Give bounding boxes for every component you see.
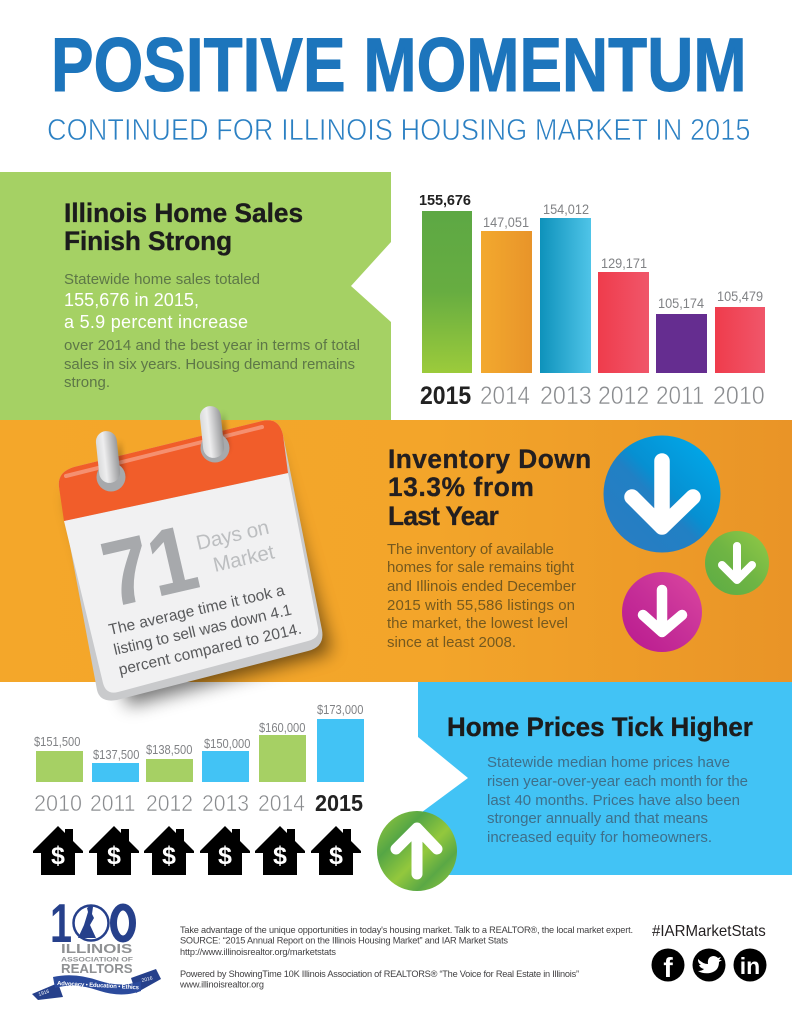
icons: dollar houses: $ bbox=[107, 842, 121, 870]
calendar text: percent compared to 2014. bbox=[117, 621, 303, 679]
bar chart: median prices: $137,500 bbox=[93, 747, 140, 762]
text: home sales body bbox=[64, 271, 360, 391]
panel: home prices bbox=[418, 682, 792, 875]
bar chart: home sales by year: 2015 bbox=[420, 382, 471, 410]
bar chart: median prices: 2012 bbox=[146, 790, 193, 816]
calendar number: 71 bbox=[93, 505, 206, 626]
text: home sales body: sales in six years. Housing demand remains bbox=[64, 356, 355, 373]
bar chart: home sales by year: 155,676 bbox=[419, 193, 471, 209]
icon: linkedin: in bbox=[740, 953, 760, 979]
bar chart: home sales by year: 2014 bbox=[480, 382, 530, 410]
calendar label: Market bbox=[211, 540, 277, 577]
logo: Illinois Association of Realtors: REALTORS bbox=[61, 961, 133, 976]
calendar text: listing to sell was down 4.1 bbox=[112, 602, 293, 659]
calendar label bbox=[194, 516, 277, 577]
heading: inventory bbox=[388, 444, 591, 531]
bar chart: home sales by year: 105,479 bbox=[717, 288, 763, 304]
bar chart: median prices: 2013 bbox=[202, 790, 249, 816]
footer text: http://www.illinoisrealtor.org/marketstats bbox=[180, 947, 336, 957]
text: inventory body: homes for sale remains tight bbox=[387, 559, 575, 576]
text: home sales body: strong. bbox=[64, 374, 110, 391]
heading: home prices: Home Prices Tick Higher bbox=[447, 712, 753, 742]
text: home prices body: risen year-over-year each month for the bbox=[487, 773, 748, 790]
icon: facebook: f bbox=[663, 952, 673, 983]
heading: inventory: Last Year bbox=[388, 501, 499, 531]
footer text: SOURCE: “2015 Annual Report on the Illinois Housing Market” and IAR Market Stats bbox=[180, 936, 508, 946]
text: home prices body: Statewide median home prices have bbox=[487, 754, 730, 771]
calendar text bbox=[107, 582, 303, 679]
icons: dollar houses: $ bbox=[273, 842, 287, 870]
bar chart: home sales by year: 147,051 bbox=[483, 214, 529, 230]
footer text bbox=[179, 925, 633, 990]
heading: home sales: Illinois Home Sales bbox=[64, 198, 303, 228]
logo ribbon bbox=[32, 969, 161, 1000]
text: inventory body: and Illinois ended December bbox=[387, 578, 576, 595]
icons: dollar houses: $ bbox=[51, 842, 65, 870]
bar chart: median prices: $151,500 bbox=[34, 734, 81, 749]
title: POSITIVE MOMENTUM bbox=[51, 22, 747, 107]
bar chart: median prices: $173,000 bbox=[317, 702, 364, 717]
logo: Illinois Association of Realtors: ASSOCIATION OF bbox=[61, 955, 133, 963]
bar chart: home sales by year bbox=[419, 193, 765, 410]
logo: Illinois Association of Realtors bbox=[32, 894, 161, 1000]
text: inventory body: the market, the lowest level bbox=[387, 615, 568, 632]
icon: green up arrow bbox=[377, 811, 457, 891]
heading: inventory: 13.3% from bbox=[388, 472, 534, 502]
text: inventory body bbox=[387, 541, 576, 651]
text: inventory body: since at least 2008. bbox=[387, 634, 516, 651]
bar chart: home sales by year: 154,012 bbox=[543, 201, 589, 217]
logo: Illinois Association of Realtors: ILLINOIS bbox=[61, 942, 132, 956]
bar chart: home sales by year: 105,174 bbox=[658, 295, 705, 311]
bar chart: home sales by year: 2013 bbox=[540, 382, 592, 410]
icon: blue down arrow bbox=[604, 436, 720, 552]
text: home sales body: 155,676 in 2015, bbox=[64, 290, 199, 310]
logo: Illinois Association of Realtors: 1 bbox=[50, 894, 72, 955]
text: home sales body: a 5.9 percent increase bbox=[64, 312, 248, 332]
bar chart: median prices: 2015 bbox=[315, 790, 363, 816]
icon: twitter bbox=[692, 948, 726, 982]
icon: pink down arrow bbox=[622, 572, 702, 652]
footer text: www.illinoisrealtor.org bbox=[179, 980, 264, 990]
text: home prices body: stronger annually and that means bbox=[487, 810, 708, 827]
bar chart: home sales by year: 129,171 bbox=[601, 255, 647, 271]
logo ribbon: 2016 bbox=[141, 975, 153, 984]
icon: linkedin bbox=[734, 948, 766, 982]
heading: home sales: Finish Strong bbox=[64, 226, 232, 256]
heading: home sales bbox=[64, 198, 303, 256]
bar chart: median prices: $138,500 bbox=[146, 742, 193, 757]
footer text: Powered by ShowingTime 10K Illinois Association of REALTORS® “The Voice for Real Estate in Illinois” bbox=[180, 969, 579, 979]
heading: inventory: Inventory Down bbox=[388, 444, 591, 474]
panel: inventory bbox=[0, 420, 792, 682]
bar chart: home sales by year: 2011 bbox=[656, 382, 704, 410]
text: inventory body: The inventory of available bbox=[387, 541, 554, 558]
icons: dollar houses: $ bbox=[162, 842, 176, 870]
icon: facebook bbox=[652, 948, 684, 983]
calendar text: The average time it took a bbox=[107, 582, 287, 639]
bar chart: home sales by year: 2012 bbox=[598, 382, 649, 410]
logo ribbon: 1916 bbox=[38, 989, 50, 998]
text: home sales body: Statewide home sales totaled bbox=[64, 271, 260, 288]
icon: green down arrow bbox=[705, 531, 769, 595]
hashtag: #IARMarketStats bbox=[652, 923, 766, 940]
subtitle: CONTINUED FOR ILLINOIS HOUSING MARKET IN 2015 bbox=[47, 113, 750, 147]
icons: dollar houses: $ bbox=[218, 842, 232, 870]
text: home prices body: last 40 months. Prices have also been bbox=[487, 792, 740, 809]
footer text: Take advantage of the unique opportunities in today's housing market. Talk to a REALTOR®, the local market expert. bbox=[180, 925, 633, 935]
calendar bbox=[59, 405, 331, 706]
bar chart: median prices: $160,000 bbox=[259, 720, 306, 735]
bar chart: median prices: 2011 bbox=[90, 790, 135, 816]
icons: dollar houses: $ bbox=[329, 842, 343, 870]
bar chart: median prices: $150,000 bbox=[204, 736, 251, 751]
calendar label: Days on bbox=[194, 516, 271, 555]
icons: dollar houses bbox=[33, 826, 361, 875]
text: home prices body: increased equity for homeowners. bbox=[487, 829, 712, 846]
text: home prices body bbox=[487, 754, 748, 846]
calendar rings bbox=[95, 405, 230, 492]
bar chart: median prices: 2010 bbox=[34, 790, 82, 816]
text: inventory body: 2015 with 55,586 listings on bbox=[387, 597, 575, 614]
bar chart: median prices: 2014 bbox=[258, 790, 305, 816]
text: home sales body: over 2014 and the best year in terms of total bbox=[64, 337, 360, 354]
bar chart: median prices bbox=[34, 702, 364, 816]
logo ribbon: Advocacy • Education • Ethics bbox=[57, 981, 140, 991]
bar chart: home sales by year: 2010 bbox=[713, 382, 765, 410]
panel: home sales bbox=[0, 172, 391, 420]
